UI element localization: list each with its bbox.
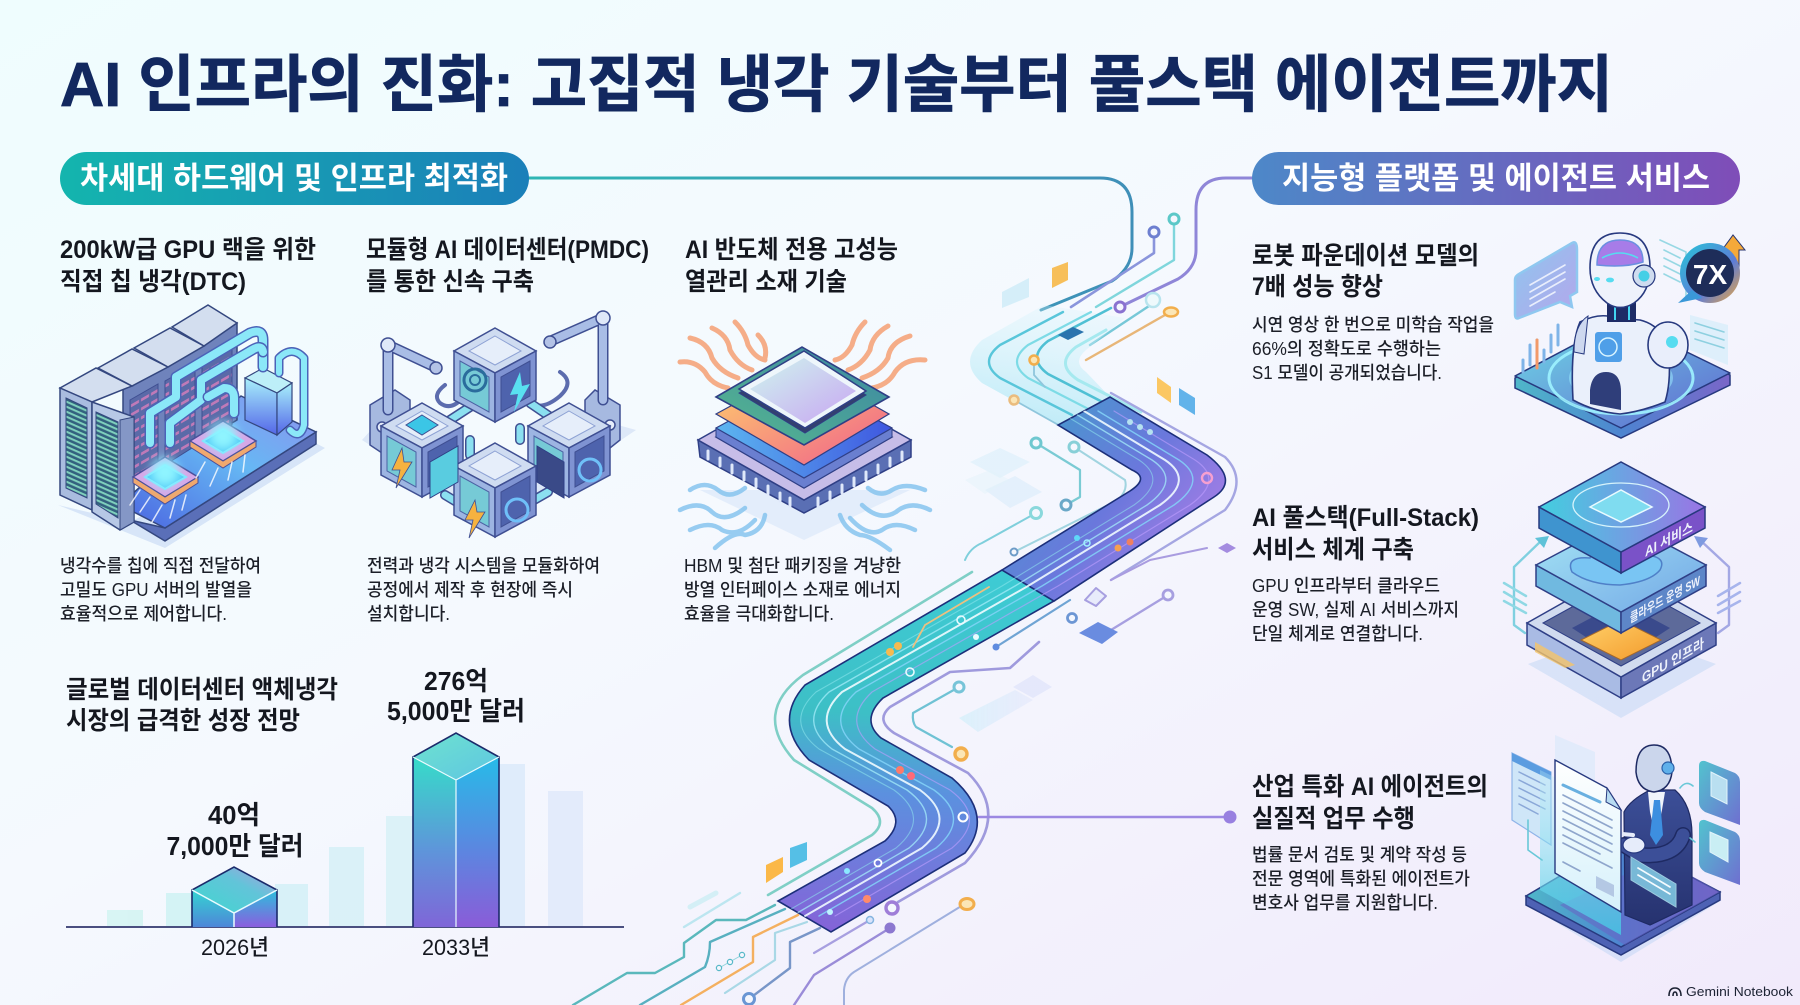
illustration: liquid cooled GPU racks <box>58 305 325 548</box>
connector: left section to pathway <box>528 178 1132 310</box>
axis labels: 2033년 <box>422 935 490 960</box>
heading: industry agents <box>1252 773 1488 833</box>
text: direct chip cooling: 고밀도 GPU 서버의 발열을 <box>60 580 252 600</box>
illustration: layered full-stack <box>1504 462 1740 718</box>
text: full stack <box>1252 576 1459 644</box>
illustration: legal document agent <box>1512 735 1740 962</box>
robot agent in suit <box>1612 745 1692 925</box>
pathway ribbon <box>778 397 1225 932</box>
glass section of the pathway <box>970 305 1141 427</box>
circuit traces: bottom <box>573 893 974 1005</box>
heading: robot foundation: 로봇 파운데이션 모델의 <box>1252 242 1479 270</box>
layer: AI service: AI 서비스 <box>1645 519 1693 561</box>
value label: 2033 <box>387 666 525 726</box>
badge: 7X <box>1678 235 1745 303</box>
heading: robot foundation <box>1252 242 1479 301</box>
arrow: left upward <box>1514 536 1549 633</box>
bar chart: liquid cooling market <box>66 666 624 960</box>
illustration: robot with 7X badge <box>1515 233 1745 438</box>
circuit traces: upper <box>1071 214 1179 360</box>
text: direct chip cooling: 효율적으로 제어합니다. <box>60 604 227 624</box>
layer: GPU base <box>1527 570 1716 698</box>
text: modular data center: 전력과 냉각 시스템을 모듈화하여 <box>367 556 600 576</box>
watermark: Gemini Notebook: Gemini Notebook <box>1686 984 1794 999</box>
heading: full stack: AI 풀스택(Full-Stack) <box>1252 504 1479 532</box>
text: thermal materials <box>684 556 901 624</box>
text: industry agents: 전문 영역에 특화된 에이전트가 <box>1252 869 1470 889</box>
squares: floating orange and blue tiles <box>766 262 1195 883</box>
text: robot foundation <box>1252 315 1494 383</box>
layer: cloud: 클라우드 운영 SW <box>1630 572 1701 626</box>
bar: 2033 <box>413 733 499 927</box>
text: full stack: 운영 SW, 실제 AI 서비스까지 <box>1252 600 1459 620</box>
side document <box>1512 753 1551 845</box>
illustration: chip with thermal layers <box>680 322 930 550</box>
heading: direct chip cooling: 직접 칩 냉각(DTC) <box>60 268 246 296</box>
heading: thermal materials <box>685 236 898 296</box>
text: industry agents: 법률 문서 검토 및 계약 작성 등 <box>1252 845 1467 865</box>
text: full stack: GPU 인프라부터 클라우드 <box>1252 576 1440 596</box>
chart heading: 글로벌 데이터센터 액체냉각 <box>66 676 338 704</box>
text: modular data center: 설치합니다. <box>367 604 450 624</box>
section pill: platform <box>1252 152 1740 205</box>
text: industry agents: 변호사 업무를 지원합니다. <box>1252 893 1438 913</box>
robot head <box>1590 233 1655 308</box>
heading: full stack <box>1252 504 1479 564</box>
axis labels <box>201 935 490 960</box>
title: AI 인프라의 진화: 고집적 냉각 기술부터 풀스택 에이전트까지 <box>60 51 1613 120</box>
section pill: hardware: 차세대 하드웨어 및 인프라 최적화 <box>80 161 508 196</box>
value label: 2033: 5,000만 달러 <box>387 696 525 726</box>
heading: direct chip cooling <box>60 236 316 296</box>
text: full stack: 단일 체계로 연결합니다. <box>1252 624 1423 644</box>
layer: AI service <box>1539 462 1705 573</box>
layer: cloud <box>1536 520 1706 633</box>
value label: 2026: 7,000만 달러 <box>166 831 304 861</box>
pale floating blocks <box>959 278 1052 732</box>
text: thermal materials: 방열 인터페이스 소재로 에너지 <box>684 580 901 600</box>
heading: thermal materials: AI 반도체 전용 고성능 <box>685 236 898 264</box>
chart heading: 시장의 급격한 성장 전망 <box>66 707 300 735</box>
layer: GPU base: GPU 인프라 <box>1642 636 1704 687</box>
heading: direct chip cooling: 200kW급 GPU 랙을 위한 <box>60 236 316 264</box>
axis labels: 2026년 <box>201 935 269 960</box>
text: robot foundation: 66%의 정확도로 수행하는 <box>1252 339 1441 359</box>
value label: 2033: 276억 <box>424 666 488 696</box>
arrow: right upward <box>1694 536 1729 633</box>
illustration: modular data center cubes <box>362 311 636 538</box>
section pill: hardware <box>60 152 529 205</box>
text: thermal materials: 효율을 극대화합니다. <box>684 604 834 624</box>
card: signing <box>1699 820 1740 885</box>
connector: right section to pathway <box>1126 178 1254 304</box>
card: document <box>1699 761 1740 825</box>
text: robot foundation: S1 모델이 공개되었습니다. <box>1252 363 1442 383</box>
speech bubble <box>1515 242 1577 318</box>
robot body <box>1572 297 1688 414</box>
heading: full stack: 서비스 체계 구축 <box>1252 536 1414 564</box>
heading: modular data center: 모듈형 AI 데이터센터(PMDC) <box>366 236 649 264</box>
text: robot foundation: 시연 영상 한 번으로 미학습 작업을 <box>1252 315 1494 335</box>
heading: industry agents: 산업 특화 AI 에이전트의 <box>1252 773 1488 801</box>
heading: industry agents: 실질적 업무 수행 <box>1252 805 1415 833</box>
value label: 2026 <box>166 800 304 861</box>
badge: 7X: 7X <box>1693 259 1727 290</box>
heading: modular data center <box>366 236 649 296</box>
text: direct chip cooling <box>60 556 261 624</box>
heading: robot foundation: 7배 성능 향상 <box>1252 273 1383 301</box>
bar: 2026 <box>192 867 277 927</box>
main document <box>1540 760 1621 935</box>
value label: 2026: 40억 <box>208 800 260 830</box>
text: industry agents <box>1252 845 1470 913</box>
section pill: platform: 지능형 플랫폼 및 에이전트 서비스 <box>1282 161 1710 196</box>
text: modular data center <box>367 556 600 624</box>
text: modular data center: 공정에서 제작 후 현장에 즉시 <box>367 580 573 600</box>
chat panel <box>1631 857 1676 907</box>
outer traces around pathway <box>768 393 1236 914</box>
chart heading <box>66 676 338 735</box>
text: direct chip cooling: 냉각수를 칩에 직접 전달하여 <box>60 556 261 576</box>
heading: modular data center: 를 통한 신속 구축 <box>366 268 534 296</box>
text: thermal materials: HBM 및 첨단 패키징을 겨냥한 <box>684 556 901 576</box>
heading: thermal materials: 열관리 소재 기술 <box>685 268 847 296</box>
